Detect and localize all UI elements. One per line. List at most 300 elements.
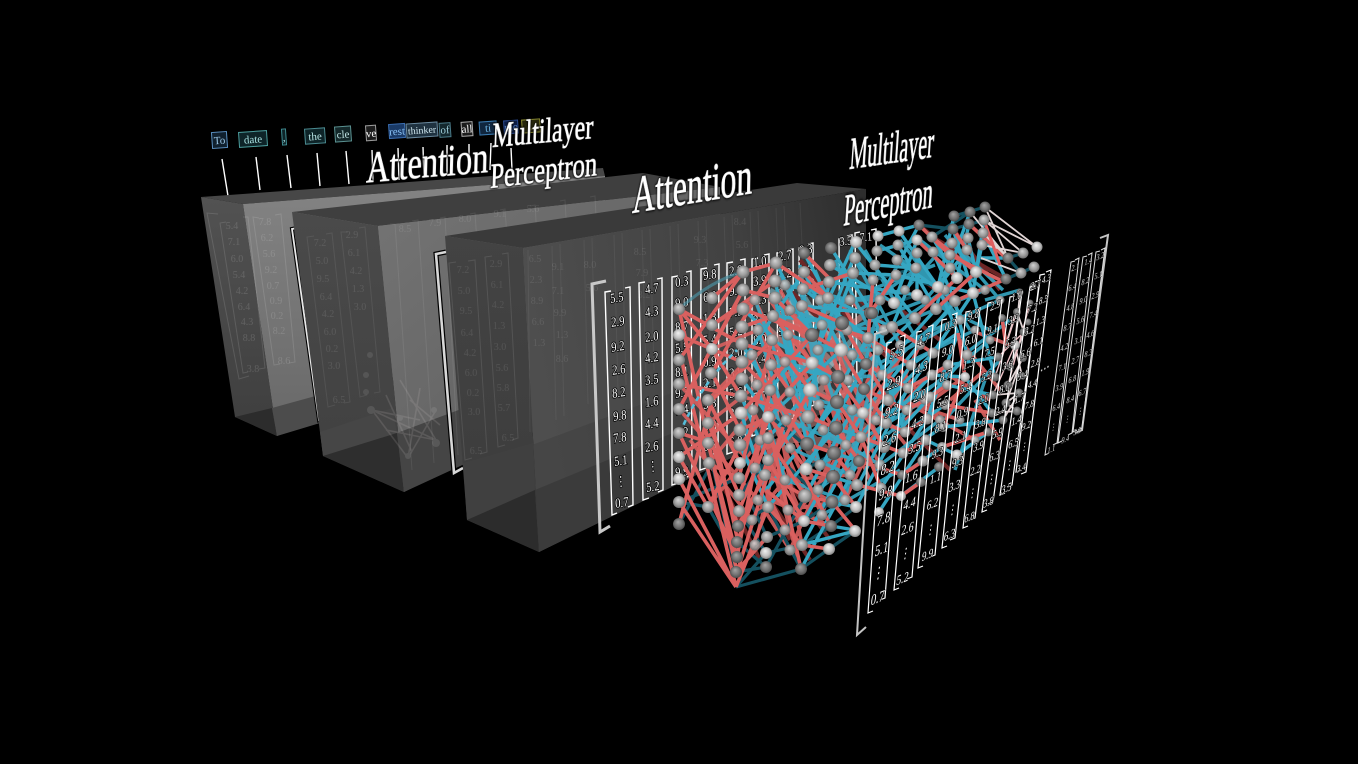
matrix numbers: 8.0 bbox=[753, 331, 767, 348]
matrix numbers: 6.8 bbox=[729, 433, 743, 450]
faint matrices in block 3: 0.2 bbox=[467, 388, 479, 399]
matrix numbers: 3.5 bbox=[645, 371, 659, 388]
output numbers: 1.1 bbox=[1047, 442, 1056, 456]
red connections bbox=[679, 224, 1006, 587]
faint matrices in block 3: 7.9 bbox=[636, 268, 648, 279]
output numbers: ⋮ bbox=[947, 501, 958, 519]
faint matrices in block 2: 9.5 bbox=[317, 274, 329, 285]
faint matrices in block 3: 8.6 bbox=[556, 354, 568, 365]
matrix numbers: 9.1 bbox=[729, 282, 743, 299]
faint matrices in block 1: 7.8 bbox=[259, 217, 271, 228]
matrix numbers: 7.1 bbox=[859, 230, 872, 245]
faint matrices in block 3: 8.5 bbox=[634, 247, 646, 258]
output numbers: 3.3 bbox=[948, 476, 961, 496]
output numbers: 6.1 bbox=[1033, 335, 1044, 350]
output numbers: 7.1 bbox=[1058, 360, 1067, 374]
matrix numbers: 3.6 bbox=[753, 311, 767, 328]
output numbers: 1.6 bbox=[904, 466, 919, 487]
output numbers: 2.6 bbox=[882, 429, 897, 451]
matrix numbers: 3.3 bbox=[703, 395, 717, 412]
faint matrices in block 1: 8.6 bbox=[278, 356, 290, 367]
output numbers: 3.2 bbox=[1023, 322, 1036, 340]
token row: input sentence: To bbox=[213, 135, 226, 147]
output numbers: 6.5 bbox=[1007, 435, 1020, 453]
bright matrix bracket between block 1 and 2 bbox=[292, 227, 328, 420]
output numbers: 4.6 bbox=[1086, 327, 1095, 341]
output numbers: ⋮ bbox=[986, 471, 996, 488]
matrix: multilayer perceptron output bbox=[857, 235, 1108, 635]
output numbers: 2.6 bbox=[900, 518, 915, 539]
output numbers: 9.4 bbox=[1016, 366, 1029, 385]
output numbers: 3.8 bbox=[974, 415, 987, 433]
matrix numbers: 1.7 bbox=[799, 283, 813, 300]
matrix numbers: 2.9 bbox=[729, 262, 743, 279]
deep translucent connections bbox=[679, 225, 1020, 569]
faint matrices in block 2: 6.1 bbox=[348, 248, 360, 259]
output numbers: ⋮ bbox=[1050, 421, 1057, 434]
output numbers: 3.9 bbox=[972, 438, 985, 456]
dark teal connections bbox=[679, 207, 1034, 587]
faint matrices in block 3: 7.2 bbox=[457, 265, 469, 276]
output numbers: 4.4 bbox=[902, 493, 917, 514]
faint matrices in block 3: 6.5 bbox=[502, 433, 514, 444]
matrix numbers: 6.6 bbox=[778, 303, 792, 320]
output numbers: 4.3 bbox=[914, 357, 929, 378]
title: multilayer perceptron (back): Perceptron bbox=[490, 144, 598, 196]
output numbers: 4.8 bbox=[1066, 300, 1075, 314]
matrix numbers: 5.1 bbox=[614, 452, 628, 469]
faint matrices in block 3: 6.0 bbox=[465, 368, 477, 379]
matrix numbers: 2.1 bbox=[703, 374, 717, 391]
output numbers: 3.8 bbox=[982, 494, 995, 512]
output numbers: 2.7 bbox=[1071, 353, 1080, 367]
faint matrices in block 3: 2.9 bbox=[490, 259, 502, 270]
output numbers: 9.3 bbox=[931, 443, 944, 463]
faint matrices in block 3: 5.6 bbox=[496, 363, 508, 374]
output numbers: 4.2 bbox=[910, 412, 925, 433]
faint matrices in block 3: 1.3 bbox=[493, 321, 505, 332]
faint matrices in block 2: 3.0 bbox=[354, 302, 366, 313]
matrix numbers: 2.9 bbox=[611, 313, 625, 330]
title: attention (front): Attention bbox=[632, 146, 753, 225]
output numbers: 1.9 bbox=[1081, 365, 1090, 379]
token row: input sentence bbox=[211, 119, 540, 149]
matrix numbers: 3.9 bbox=[753, 272, 767, 289]
cyan connections bbox=[740, 212, 1008, 569]
faint matrices in block 3 bbox=[449, 203, 804, 460]
matrix numbers: 9.9 bbox=[675, 463, 689, 480]
token row: input sentence: the bbox=[308, 131, 322, 143]
output numbers: 9.0 bbox=[1079, 293, 1088, 307]
token row: input sentence: . bbox=[529, 120, 533, 133]
output numbers: 5.4 bbox=[959, 378, 972, 398]
faint matrices in block 3: 6.1 bbox=[491, 280, 503, 291]
faint matrices in block 2: 7.9 bbox=[429, 218, 441, 229]
matrix numbers: 8.5 bbox=[799, 262, 813, 279]
matrix numbers: 0.7 bbox=[615, 494, 629, 511]
output numbers: 6.4 bbox=[1052, 400, 1061, 414]
matrix numbers: 1.6 bbox=[645, 393, 659, 410]
output numbers: 1.4 bbox=[1010, 411, 1023, 430]
faint matrices in block 2: 4.2 bbox=[322, 309, 334, 320]
output numbers: 7.2 bbox=[1026, 300, 1039, 318]
faint matrices in block 1 bbox=[207, 213, 295, 379]
faint matrices in block 1: 6.4 bbox=[238, 302, 250, 313]
deep nodes bbox=[746, 280, 1004, 556]
output numbers: 2.1 bbox=[1071, 260, 1080, 274]
output numbers: 3.2 bbox=[1096, 249, 1105, 263]
faint matrices in block 3: 5.6 bbox=[586, 283, 598, 294]
faint matrices in block 3: 6.5 bbox=[529, 254, 541, 265]
output numbers: 1.3 bbox=[962, 354, 975, 374]
output numbers: 6.8 bbox=[1068, 372, 1077, 386]
output numbers: 6.2 bbox=[926, 494, 939, 514]
output numbers: 7.5 bbox=[983, 344, 996, 362]
matrix numbers: 7.5 bbox=[729, 303, 743, 320]
matrix numbers: ⋮ bbox=[615, 473, 626, 490]
token arrows bbox=[222, 143, 512, 196]
matrix numbers: 8.1 bbox=[675, 363, 689, 380]
faint matrices in block 1: 9.2 bbox=[265, 265, 277, 276]
output numbers: 6.3 bbox=[943, 525, 956, 545]
output numbers: 7.4 bbox=[1089, 307, 1098, 321]
output numbers: 7.8 bbox=[1024, 398, 1035, 413]
faint matrices in block 2 bbox=[307, 196, 604, 470]
matrix numbers: 5.4 bbox=[703, 331, 717, 348]
faint matrices in block 1: 5.4 bbox=[226, 221, 238, 232]
matrix numbers: 5.3 bbox=[753, 291, 767, 308]
title: multilayer perceptron (front): Multilayer bbox=[848, 117, 936, 179]
faint matrices in block 3: 3.0 bbox=[468, 407, 480, 418]
output numbers: 5.3 bbox=[1004, 334, 1017, 352]
faint matrices in block 3: 8.4 bbox=[734, 217, 746, 228]
token row: input sentence: me bbox=[504, 121, 518, 134]
output numbers: ⋮ bbox=[1077, 405, 1084, 418]
title: attention (back): Attention bbox=[366, 134, 489, 192]
matrix numbers: 7.4 bbox=[675, 401, 689, 418]
matrix numbers: 0.3 bbox=[675, 273, 689, 290]
output numbers: 2.9 bbox=[1091, 288, 1100, 302]
output numbers: 8.7 bbox=[1063, 320, 1072, 334]
output numbers: 3.1 bbox=[1074, 333, 1083, 347]
output numbers: ⋮ bbox=[1064, 413, 1071, 426]
output numbers: 6.3 bbox=[988, 448, 1001, 466]
matrix column brackets bbox=[605, 229, 877, 515]
matrix numbers: 7.2 bbox=[778, 265, 792, 282]
faint matrices in block 3: 8.9 bbox=[531, 296, 543, 307]
matrix numbers: 9.3 bbox=[799, 241, 813, 258]
faint matrices in block 2: 3.0 bbox=[328, 361, 340, 372]
output column brackets bbox=[868, 270, 1051, 613]
faint matrices in block 3: 9.1 bbox=[552, 262, 564, 273]
output numbers: ⋮ bbox=[967, 485, 977, 502]
output numbers: 3.4 bbox=[1016, 461, 1027, 476]
output numbers: 3.9 bbox=[1007, 311, 1020, 329]
matrix numbers: 8.7 bbox=[675, 318, 689, 335]
faint matrices in block 3: 9.3 bbox=[694, 235, 706, 246]
output numbers: 3.5 bbox=[1000, 480, 1013, 498]
faint matrices in block 2: 8.0 bbox=[459, 214, 471, 225]
output numbers: 8.4 bbox=[1066, 392, 1075, 406]
output numbers: 6.0 bbox=[964, 330, 977, 350]
output numbers: 1.0 bbox=[1010, 288, 1023, 306]
faint matrices in block 1: 7.1 bbox=[228, 237, 240, 248]
output numbers: 8.5 bbox=[1038, 293, 1049, 308]
output numbers: 8.0 bbox=[998, 380, 1011, 398]
translucent cyan curve bbox=[679, 272, 743, 309]
token row: input sentence: thinker bbox=[408, 124, 437, 137]
matrix numbers: 2.6 bbox=[612, 361, 626, 378]
output numbers: ⋮ bbox=[900, 544, 912, 563]
faint matrices in block 1: 0.2 bbox=[271, 311, 283, 322]
output numbers: 9.2 bbox=[1021, 419, 1032, 434]
matrix numbers: 6.0 bbox=[703, 288, 717, 305]
faint matrices in block 2: 9.1 bbox=[494, 209, 506, 220]
output numbers: ⋮ bbox=[872, 563, 885, 585]
matrix numbers: 3.2 bbox=[778, 284, 792, 301]
matrix numbers: 4.2 bbox=[645, 349, 659, 366]
matrix numbers: 5.9 bbox=[753, 369, 767, 386]
token row: input sentence: ve bbox=[365, 128, 377, 140]
output numbers: 7.8 bbox=[876, 509, 891, 531]
faint matrices in block 1: 8.8 bbox=[243, 333, 255, 344]
dashed cyan curve bbox=[680, 350, 737, 433]
faint matrices in block 1: 4.3 bbox=[241, 317, 253, 328]
output numbers: 5.5 bbox=[936, 392, 949, 412]
matrix numbers: 9.8 bbox=[703, 266, 717, 283]
faint matrices in block 1: 0.7 bbox=[267, 281, 279, 292]
titles: second layer labels bbox=[366, 107, 598, 196]
output numbers: 5.5 bbox=[889, 342, 904, 364]
matrix numbers: 2.0 bbox=[645, 328, 659, 345]
faint matrices in block 2: 5.6 bbox=[527, 204, 539, 215]
small grey nodes, far right layer bbox=[984, 282, 1036, 436]
faint matrices in block 1: 8.2 bbox=[273, 326, 285, 337]
matrix numbers bbox=[610, 230, 872, 511]
output numbers: 1.1 bbox=[929, 468, 942, 488]
output numbers: 9.4 bbox=[1061, 432, 1070, 446]
token row: input sentence: date bbox=[244, 133, 263, 147]
faint matrices in block 3: 4.2 bbox=[492, 300, 504, 311]
matrix numbers: 6.3 bbox=[703, 437, 717, 454]
faint matrices in block 2: 6.4 bbox=[320, 292, 332, 303]
faint matrices in block 2: 8.5 bbox=[399, 224, 411, 235]
faint matrices in block 3: 8.0 bbox=[584, 260, 596, 271]
matrix numbers: 4.7 bbox=[645, 280, 659, 297]
output numbers: ⋮ bbox=[1020, 441, 1029, 455]
output numbers: 2.0 bbox=[912, 385, 927, 406]
faint matrices in block 1: 5.4 bbox=[233, 270, 245, 281]
faint matrices in block 1: 6.0 bbox=[231, 254, 243, 265]
matrix numbers: 2.4 bbox=[753, 350, 767, 367]
faint matrices in block 2: 6.5 bbox=[333, 395, 345, 406]
faint matrices in block 3: 6.6 bbox=[532, 317, 544, 328]
output numbers: 4.3 bbox=[1041, 272, 1052, 287]
faint matrices in block 2: 7.2 bbox=[314, 238, 326, 249]
output numbers: 1.7 bbox=[1013, 389, 1026, 408]
output numbers: 2.0 bbox=[977, 391, 990, 409]
layer block 1: attention bbox=[201, 168, 605, 436]
matrix numbers: 5.5 bbox=[610, 289, 624, 306]
output numbers: 5.2 bbox=[895, 568, 910, 589]
token row: input sentence: rest bbox=[389, 125, 405, 139]
output numbers: 4.4 bbox=[1027, 377, 1038, 392]
faint matrices in block 3: 9.5 bbox=[460, 306, 472, 317]
faint matrices in block 3: 5.6 bbox=[736, 240, 748, 251]
matrix numbers: 5.2 bbox=[729, 323, 743, 340]
matrix numbers: 2.4 bbox=[729, 404, 743, 421]
faint matrices in block 3: 1.3 bbox=[533, 338, 545, 349]
matrix numbers: 1.0 bbox=[753, 253, 767, 270]
matrix outer bracket bbox=[592, 281, 610, 532]
output numbers: 8.1 bbox=[934, 417, 947, 437]
output numbers: 6.4 bbox=[1068, 280, 1077, 294]
output numbers: 5.1 bbox=[874, 539, 889, 561]
matrix: attention output columns bbox=[592, 229, 877, 532]
output numbers: 2.4 bbox=[994, 401, 1007, 420]
token row: input sentence: cle bbox=[336, 129, 350, 141]
output numbers: 2.9 bbox=[886, 373, 901, 395]
output numbers: 8.2 bbox=[880, 458, 895, 480]
output numbers: 1.4 bbox=[1084, 254, 1093, 268]
output numbers: 8.2 bbox=[1081, 274, 1090, 288]
output numbers: 2.9 bbox=[989, 297, 1002, 315]
layer block 3: front attention bbox=[445, 183, 866, 552]
faint matrices in block 2: 0.2 bbox=[326, 344, 338, 355]
faint matrices in block 1: 6.2 bbox=[261, 233, 273, 244]
matrix numbers: 1.3 bbox=[703, 309, 717, 326]
title: multilayer perceptron (back): Multilayer bbox=[492, 107, 594, 155]
faint matrices in block 3: 6.5 bbox=[470, 446, 482, 457]
output numbers: 8.3 bbox=[1084, 346, 1093, 360]
faint matrices in block 3: 6.4 bbox=[461, 328, 473, 339]
token row: input sentence: of bbox=[440, 124, 450, 137]
matrix numbers: 8.2 bbox=[612, 384, 626, 401]
title: multilayer perceptron (front): Perceptron bbox=[842, 167, 935, 236]
faint matrices in block 2: 2.9 bbox=[346, 230, 358, 241]
bright matrix bracket between block 2 and 3 bbox=[436, 252, 463, 473]
output numbers: 3.5 bbox=[907, 437, 922, 458]
matrix numbers: 4.4 bbox=[645, 415, 659, 432]
output numbers: 4.7 bbox=[916, 329, 931, 350]
matrix numbers: 7.8 bbox=[613, 429, 627, 446]
output numbers: 1.3 bbox=[1035, 314, 1046, 329]
output numbers: 5.5 bbox=[1073, 424, 1082, 438]
matrix numbers: 9.3 bbox=[675, 384, 689, 401]
matrix numbers: 3.8 bbox=[729, 364, 743, 381]
faint matrices in block 3: 5.8 bbox=[497, 383, 509, 394]
title: multilayer perceptron (front) bbox=[842, 117, 936, 236]
title: multilayer perceptron (back) bbox=[490, 107, 598, 196]
output numbers: 9.8 bbox=[878, 483, 893, 505]
output numbers: ⋮ bbox=[925, 521, 936, 539]
neural network: nodes bbox=[673, 202, 1042, 578]
output numbers: 9.9 bbox=[921, 545, 934, 565]
faint matrices in block 2: 1.3 bbox=[352, 284, 364, 295]
token row: input sentence: , bbox=[282, 132, 286, 144]
output numbers: 3.9 bbox=[1055, 380, 1064, 394]
matrix numbers: 5.8 bbox=[703, 417, 717, 434]
matrix numbers: 4.3 bbox=[645, 303, 659, 320]
output numbers: 6.6 bbox=[1019, 344, 1032, 363]
matrix numbers: 5.2 bbox=[646, 478, 660, 495]
output numbers: 9.8 bbox=[967, 305, 980, 325]
output numbers: 9.2 bbox=[884, 401, 899, 423]
faint matrices in block 1: 4.2 bbox=[236, 286, 248, 297]
faint matrices in block 2: 6.0 bbox=[324, 327, 336, 338]
matrix numbers: ⋮ bbox=[676, 448, 687, 465]
matrix numbers: 9.8 bbox=[613, 407, 627, 424]
output numbers: ⋮ bbox=[1004, 457, 1014, 474]
faint matrices in block 1: 5.6 bbox=[263, 249, 275, 260]
output numbers: 5.6 bbox=[1076, 313, 1085, 327]
matrix numbers: 2.7 bbox=[778, 247, 792, 264]
neural network: connections bbox=[679, 207, 1037, 587]
faint matrices in block 2: 5.0 bbox=[316, 256, 328, 267]
output numbers: 5.1 bbox=[1094, 268, 1103, 282]
output numbers: 5.2 bbox=[980, 368, 993, 386]
faint matrices in block 3: 5.0 bbox=[458, 286, 470, 297]
output numbers: 9.3 bbox=[951, 452, 964, 472]
output numbers: 3.6 bbox=[1001, 356, 1014, 375]
layer block 2: multilayer perceptron bbox=[292, 173, 720, 492]
output numbers: 6.7 bbox=[1078, 385, 1087, 399]
token row: input sentence: ti bbox=[485, 122, 492, 135]
matrix numbers: 2.0 bbox=[729, 344, 743, 361]
matrix numbers: 2.6 bbox=[645, 438, 659, 455]
matrix numbers: 6.2 bbox=[675, 424, 689, 441]
matrix numbers: ⋮ bbox=[647, 458, 658, 475]
output ellipsis: ... bbox=[1040, 353, 1050, 376]
faint network seen through block 2 bbox=[363, 352, 440, 459]
matrix numbers: 7.7 bbox=[753, 388, 767, 405]
faint matrices in block 3: 5.7 bbox=[498, 403, 510, 414]
faint matrices in block 1: 0.9 bbox=[270, 296, 282, 307]
faint matrices in block 3: 9.9 bbox=[554, 308, 566, 319]
output numbers: 9.1 bbox=[986, 321, 999, 339]
faint matrices in block 3: 3.0 bbox=[494, 342, 506, 353]
pale connections far right bbox=[970, 207, 1037, 420]
faint matrices in block 1: 3.8 bbox=[247, 364, 259, 375]
faint matrices in block 3: 1.3 bbox=[556, 330, 568, 341]
token row: input sentence: all bbox=[461, 123, 473, 136]
output numbers: 2.2 bbox=[969, 462, 982, 480]
faint matrices in block 3: 7.1 bbox=[552, 286, 564, 297]
output numbers bbox=[870, 249, 1105, 610]
faint matrices in block 3: 7.3 bbox=[696, 258, 708, 269]
output numbers: 5.9 bbox=[991, 425, 1004, 443]
output numbers: 0.3 bbox=[944, 315, 957, 335]
matrix numbers: 3.5 bbox=[839, 234, 853, 249]
faint matrices in block 2: 4.2 bbox=[350, 266, 362, 277]
faint matrices in block 3: 2.3 bbox=[530, 275, 542, 286]
faint matrices in block 3: 3.2 bbox=[638, 290, 650, 301]
matrix numbers: 5.5 bbox=[675, 339, 689, 356]
output numbers: 2.7 bbox=[1029, 276, 1042, 295]
output outer brackets bbox=[857, 235, 1108, 635]
matrix numbers: 9.4 bbox=[778, 322, 792, 339]
matrix numbers: 0.9 bbox=[703, 353, 717, 370]
matrix numbers: 9.2 bbox=[611, 338, 625, 355]
output numbers: 8.7 bbox=[939, 366, 952, 386]
output numbers: 4.2 bbox=[1060, 340, 1069, 354]
matrix numbers: 5.6 bbox=[729, 384, 743, 401]
matrix numbers: 9.0 bbox=[675, 294, 689, 311]
output numbers: 0.9 bbox=[956, 403, 969, 423]
output numbers: 6.8 bbox=[963, 509, 976, 527]
faint matrices in block 3: 4.2 bbox=[464, 348, 476, 359]
output numbers: 0.7 bbox=[870, 588, 885, 610]
